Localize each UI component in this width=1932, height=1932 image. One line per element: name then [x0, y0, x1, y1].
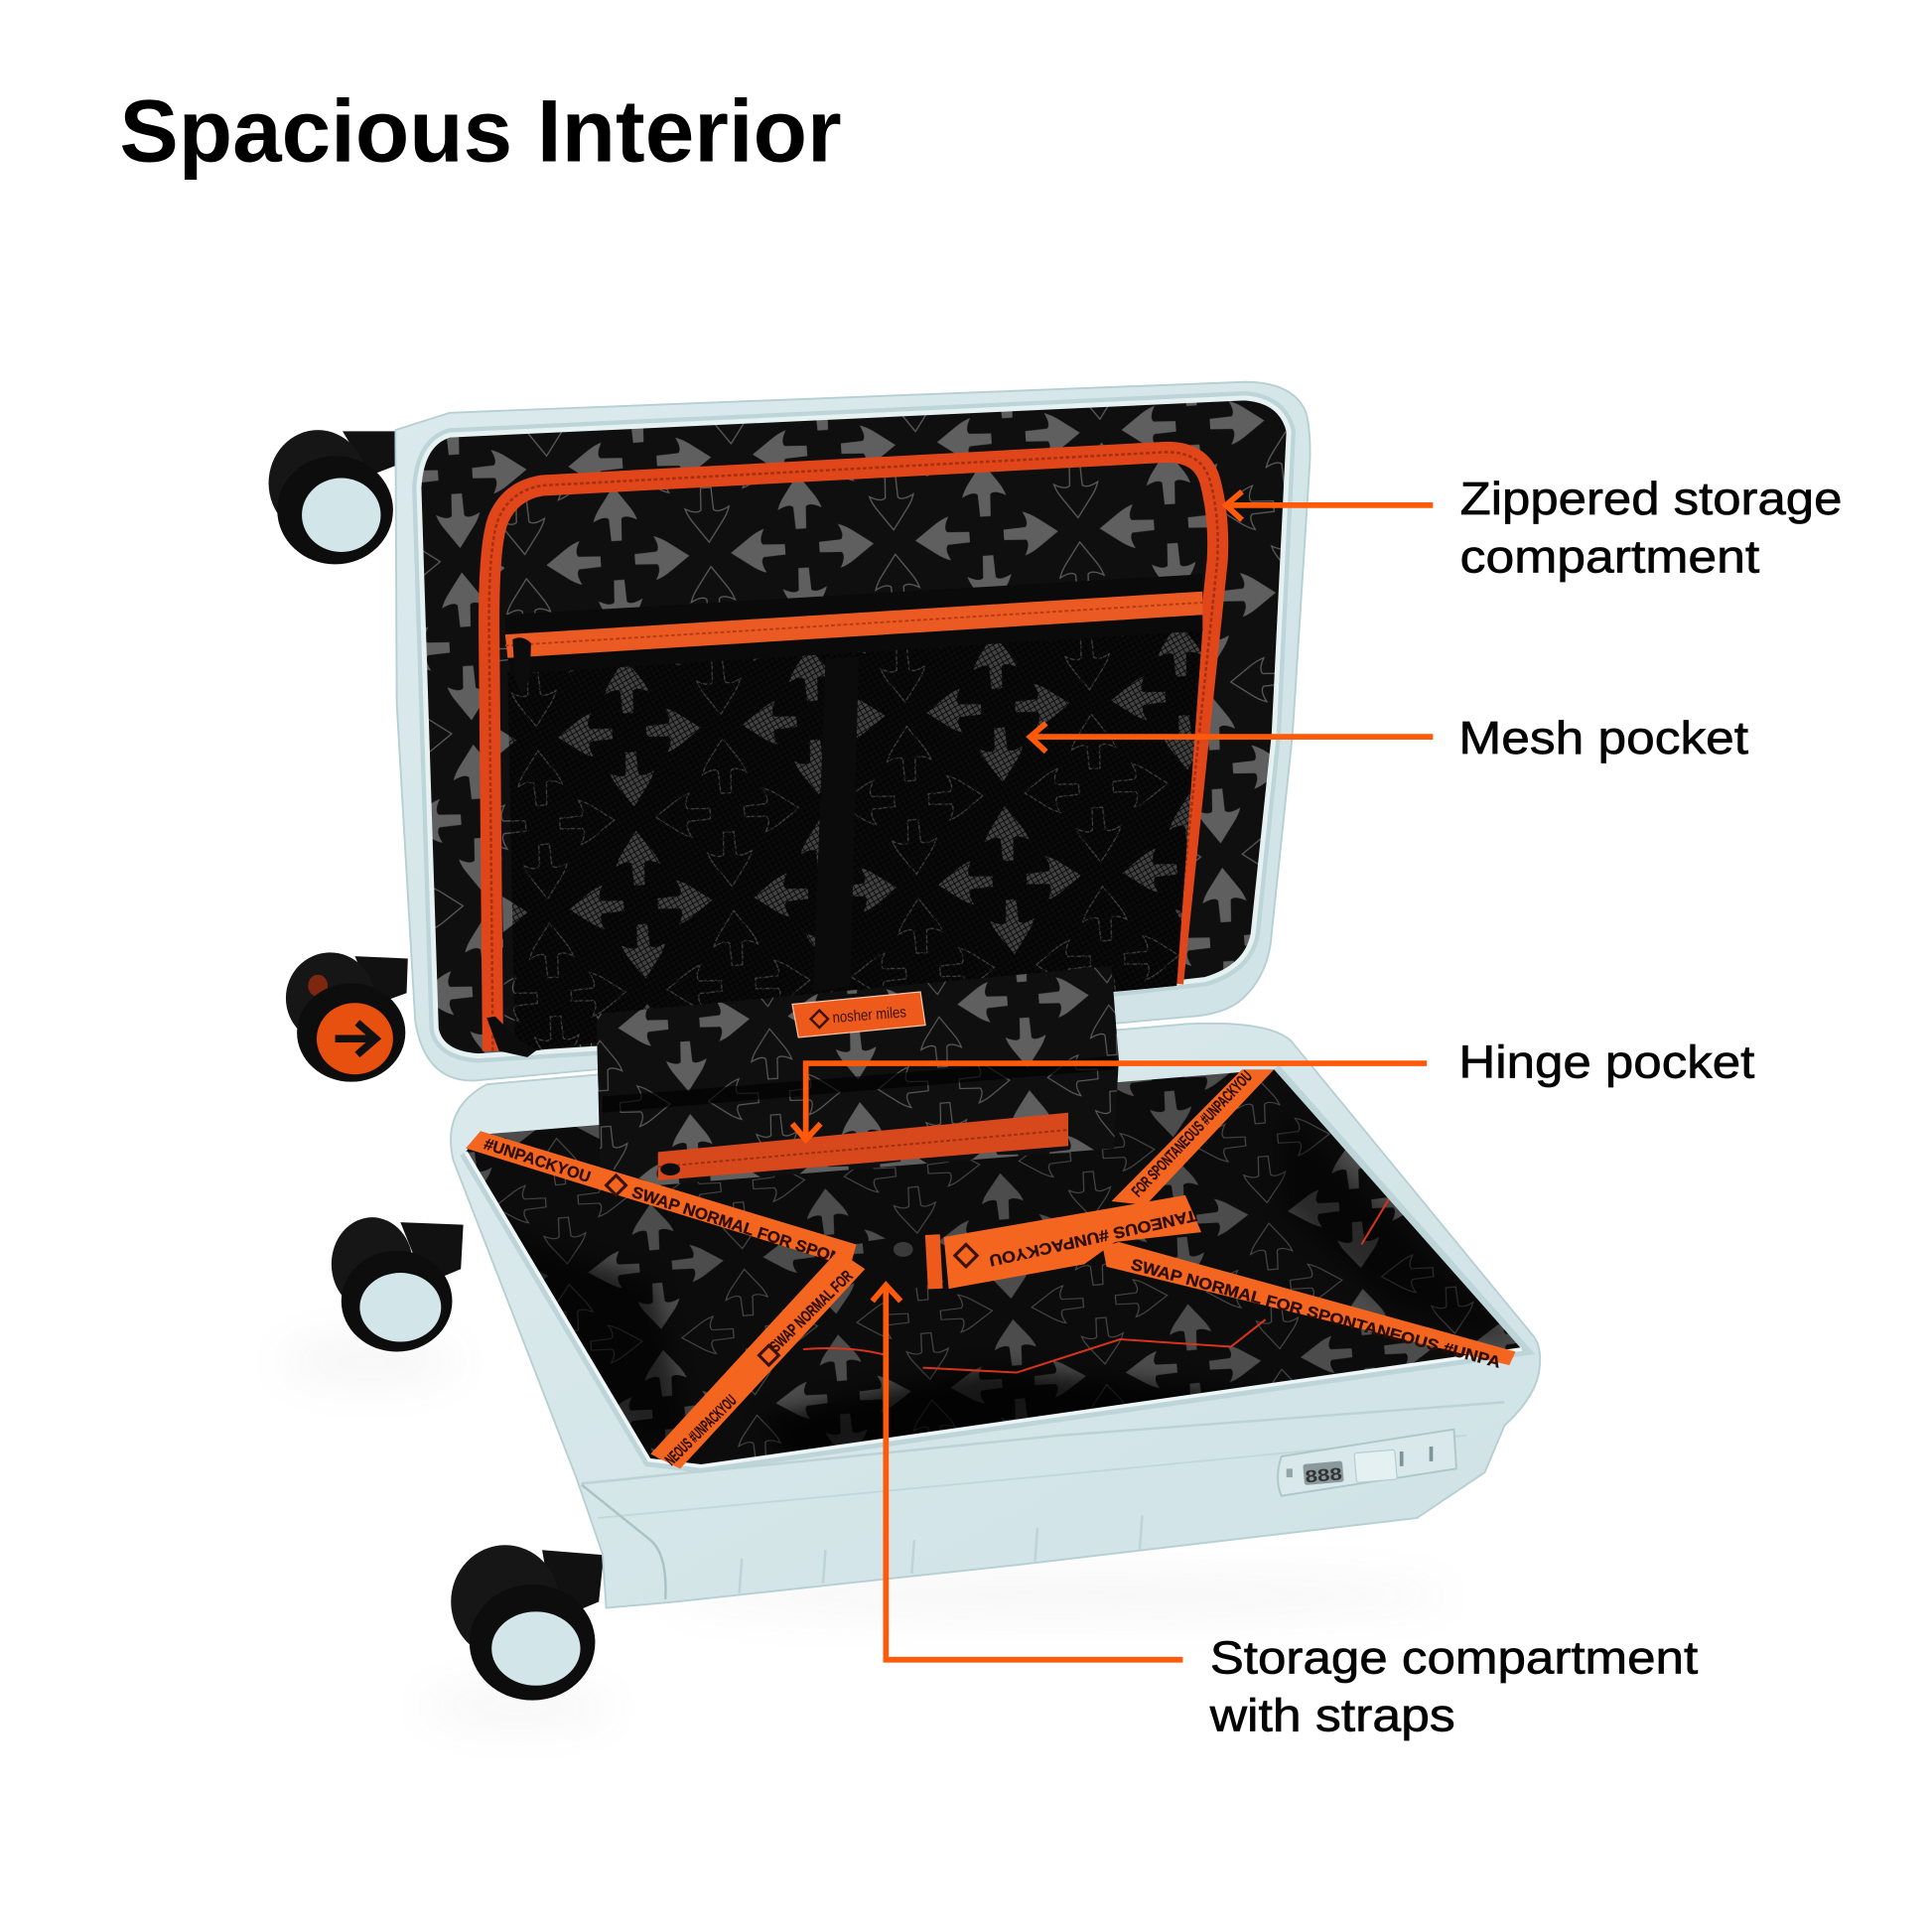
wheel: lid bottom, orange — [286, 952, 408, 1082]
wheel: base front — [451, 1545, 604, 1701]
strap: buckle band: TANEOUS #UNPACKYOU — [988, 1206, 1198, 1270]
strap: upper right: FOR SPONTANEOUS #UNPACKYOU — [1129, 1067, 1256, 1200]
strap: lower right — [1103, 1242, 1516, 1372]
panel: base lining — [456, 1059, 1540, 1478]
strap: lower left: SWAP NORMAL FOR — [766, 1267, 857, 1356]
strap: lower left: NEOUS #UNPACKYOU — [662, 1392, 741, 1469]
label: zippered storage compartment: Zippered storage — [1460, 473, 1842, 524]
brand tag — [792, 992, 925, 1037]
lid shell — [395, 382, 1311, 1080]
combination lock — [1278, 1430, 1456, 1496]
label: storage compartment with straps: Storage compartment — [1210, 1631, 1698, 1683]
label: storage compartment with straps: with straps — [1209, 1690, 1455, 1741]
red piping — [803, 1197, 1390, 1373]
icon: arrow on wheel — [336, 1023, 376, 1054]
strap: upper left: SWAP NORMAL FOR SPON — [629, 1183, 844, 1268]
lid lining — [419, 398, 1289, 1056]
horizontal zipper — [505, 592, 1202, 658]
wheel: lid top — [269, 430, 402, 564]
buckle — [863, 1232, 943, 1294]
panel: mesh pocket — [486, 574, 1202, 1057]
hinge pocket zipper — [658, 1113, 1068, 1180]
lid rim — [419, 398, 1289, 1056]
strap: upper right — [1111, 1067, 1274, 1205]
fabric folds — [538, 1118, 1507, 1449]
strap: lower left — [650, 1251, 865, 1469]
panel: straps — [466, 1067, 1516, 1469]
arrow: hinge pocket — [792, 1063, 1427, 1140]
arrow: storage compartment with straps — [873, 1285, 1182, 1660]
strap: lower right: SWAP NORMAL FOR SPONTANEOUS #UNPA — [1129, 1256, 1503, 1372]
combination lock: 888 — [1305, 1463, 1343, 1486]
strap: upper left: #UNPACKYOU — [482, 1135, 593, 1186]
zip pull bottom — [486, 1017, 537, 1057]
zipper frame — [489, 452, 1218, 1051]
arrow: mesh pocket — [1031, 724, 1433, 752]
base shell — [451, 1024, 1540, 1608]
label: zippered storage compartment: compartment — [1460, 530, 1760, 582]
floor shadow — [277, 1339, 1453, 1725]
label: mesh pocket: Mesh pocket — [1458, 712, 1748, 763]
label: hinge pocket: Hinge pocket — [1458, 1035, 1755, 1087]
strap: upper left — [466, 1131, 857, 1268]
title: Spacious Interior — [119, 81, 842, 181]
strap: buckle band — [944, 1195, 1201, 1289]
arrow: zippered storage compartment — [1226, 491, 1433, 520]
panel: zippered storage compartment — [489, 452, 1218, 1051]
panel: hinge pocket — [597, 966, 1119, 1185]
wheel: base rear — [332, 1217, 464, 1351]
brand tag: nosher miles — [832, 1004, 907, 1027]
zip pull top — [512, 637, 531, 697]
